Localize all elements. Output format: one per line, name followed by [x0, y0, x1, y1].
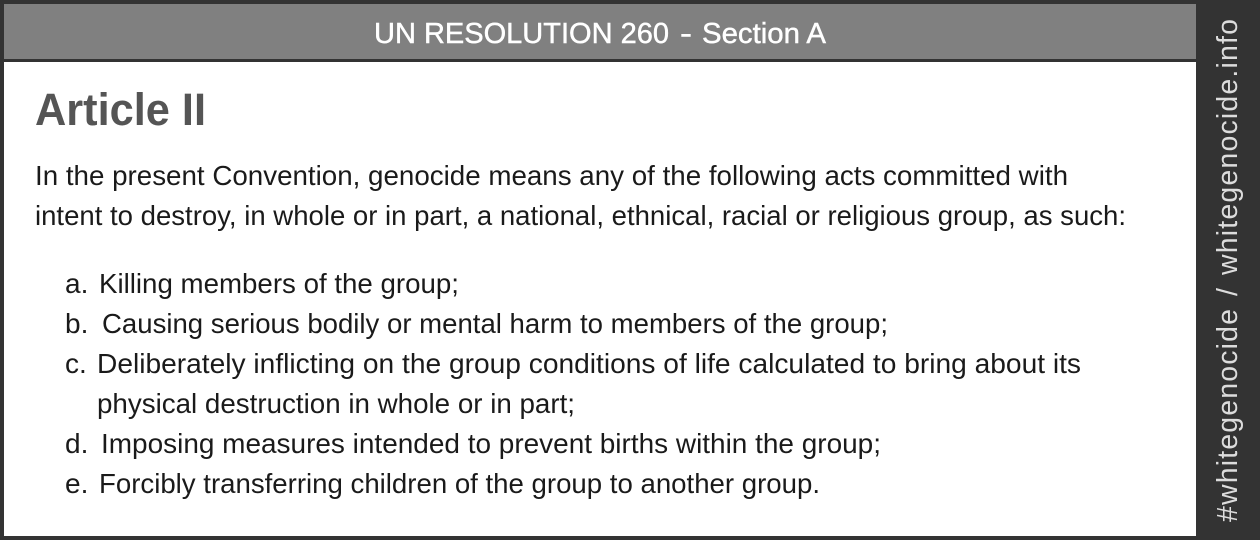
intro paragraph: intent to destroy, in whole or in part, a national, ethnical, racial or religious group, as such:	[35, 200, 1126, 231]
list of acts	[65, 268, 1081, 499]
title	[374, 18, 827, 50]
header bar	[4, 4, 1196, 59]
intro paragraph: In the present Convention, genocide means any of the following acts committed with	[35, 160, 1068, 191]
list item b: b.	[65, 308, 88, 339]
title: -	[680, 18, 692, 50]
list item c: c.	[65, 348, 87, 379]
list item c: physical destruction in whole or in part;	[97, 388, 575, 419]
list item d: Imposing measures intended to prevent births within the group;	[101, 428, 881, 459]
heading: Article II: Article II	[35, 84, 206, 135]
side label: hashtag and website: /	[1212, 288, 1244, 296]
side label: hashtag and website: #whitegenocide	[1212, 309, 1244, 522]
list item e: e.	[65, 468, 88, 499]
list item c: Deliberately inflicting on the group conditions of life calculated to bring about its	[97, 348, 1081, 379]
title: UN RESOLUTION 260	[374, 18, 669, 50]
list item c	[65, 348, 1081, 419]
list item e: Forcibly transferring children of the group to another group.	[99, 468, 820, 499]
list item a: Killing members of the group;	[99, 268, 459, 299]
list item a: a.	[65, 268, 88, 299]
title: Section A	[702, 18, 827, 50]
list item d: d.	[65, 428, 88, 459]
intro paragraph	[35, 160, 1126, 231]
side label: hashtag and website	[1212, 19, 1244, 522]
list item b: Causing serious bodily or mental harm to members of the group;	[102, 308, 888, 339]
side label: hashtag and website: whitegenocide.info	[1212, 19, 1244, 276]
